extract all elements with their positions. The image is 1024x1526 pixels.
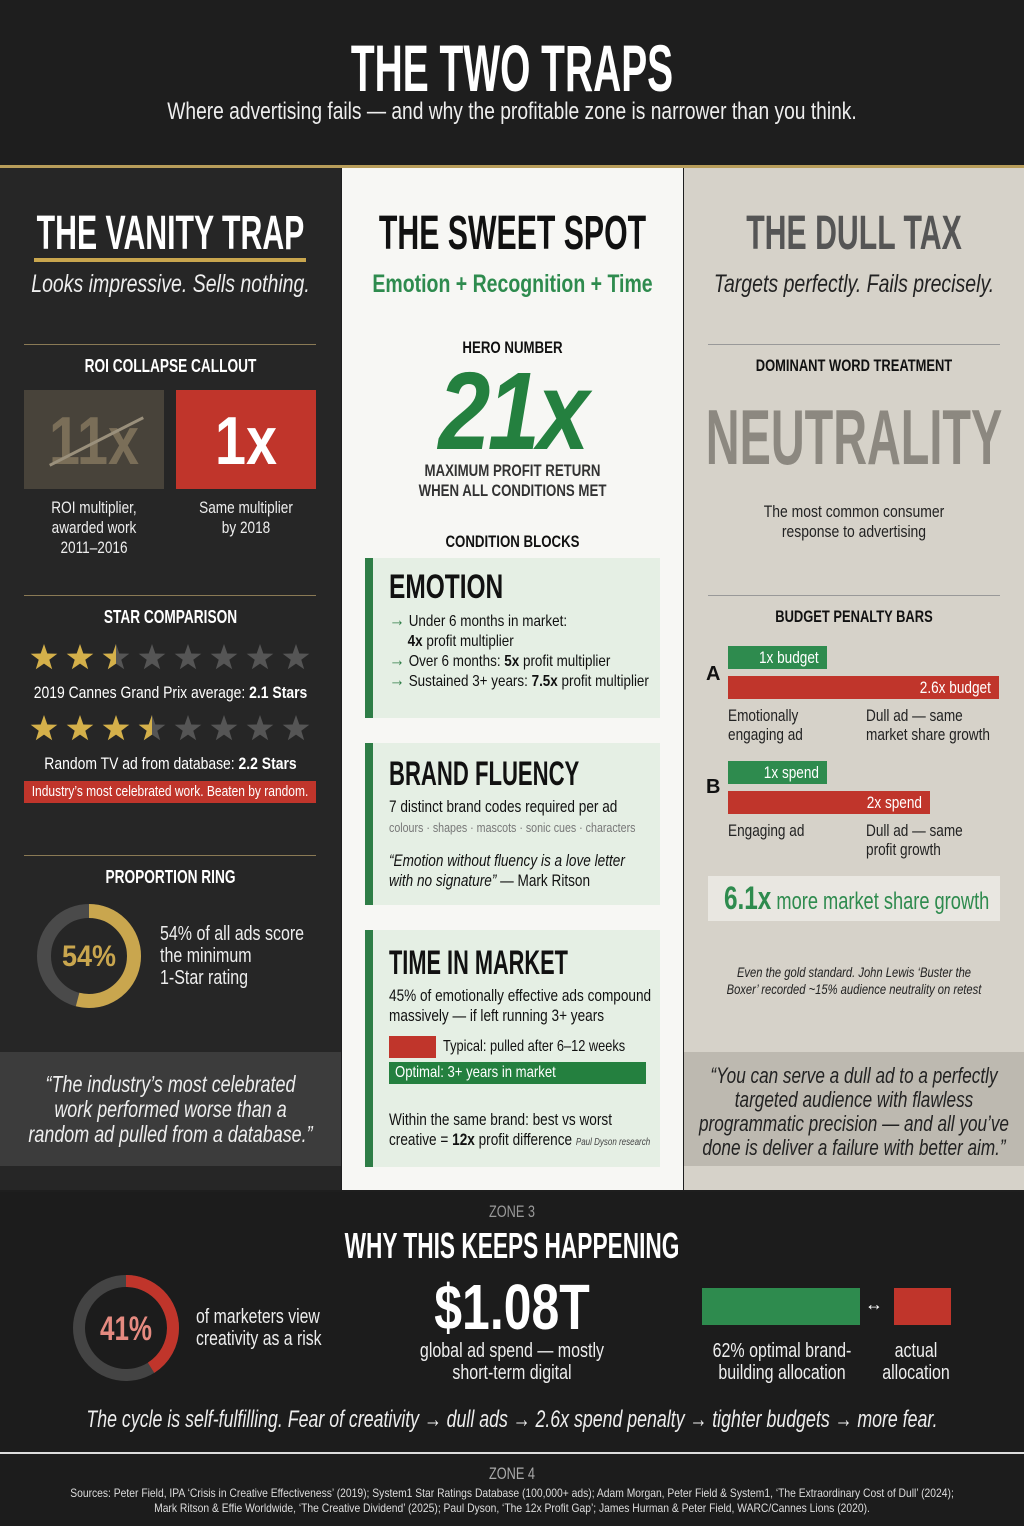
- stat: 1.08T: global ad spend — mostly: [420, 1340, 604, 1362]
- subtitle: Where advertising fails — and why the profitable zone is narrower than you think.: [167, 98, 857, 125]
- quote: dull: “You can serve a dull ad to a perfectly: [710, 1063, 998, 1088]
- allocation bars: actual: [895, 1340, 937, 1362]
- stars row 2: [30, 715, 309, 740]
- quote: dull: programmatic precision — and all you’ve: [699, 1111, 1009, 1136]
- zone 3: why this keeps happening: [0, 1192, 1024, 1452]
- ring: 41%: [73, 1275, 179, 1381]
- bar: optimal: Optimal: 3+ years in market: [395, 1064, 556, 1081]
- box: 11x crossed: 11x: [49, 403, 139, 479]
- block: brand fluency: with no signature” — Mark Ritson: [389, 871, 590, 890]
- block: time in market: Typical: pulled after 6–12 weeks: [443, 1038, 625, 1055]
- block: emotion: → Sustained 3+ years: 7.5x profit multiplier: [389, 670, 649, 691]
- bar: optimal: [389, 1062, 646, 1084]
- panel: dull tax: [684, 168, 1024, 1190]
- block: time in market: creative = 12x profit difference Paul Dyson research: [389, 1130, 650, 1149]
- tagline: Targets perfectly. Fails precisely.: [714, 270, 994, 298]
- zone 4: sources: ZONE 4: [489, 1464, 535, 1483]
- block: time in market: Within the same brand: best vs worst: [389, 1110, 612, 1129]
- block: time in market: 45% of emotionally effective ads compound: [389, 986, 651, 1005]
- red banner: Industry’s most celebrated work. Beaten by random.: [32, 783, 308, 800]
- budget penalty bars: 1x budget: [759, 648, 819, 667]
- subheading: Emotion + Recognition + Time: [372, 270, 653, 298]
- header: [0, 0, 1024, 166]
- bar: typical: [389, 1036, 436, 1058]
- zone 3: why this keeps happening: creativity as a risk: [196, 1328, 322, 1350]
- allocation bars: 62% optimal brand-: [713, 1340, 851, 1362]
- zone 4: sources: [0, 1454, 1024, 1526]
- caption: John Lewis: Boxer’ recorded ~15% audience neutrality on retest: [727, 981, 981, 997]
- budget penalty bars: Emotionally: [728, 706, 798, 725]
- block: emotion: [365, 558, 660, 718]
- caption: ROI awarded: 2011–2016: [60, 538, 128, 557]
- budget penalty bars: profit growth: [866, 840, 941, 859]
- tagline: Looks impressive. Sells nothing.: [31, 270, 310, 298]
- ROI collapse callout: ROI COLLAPSE CALLOUT: [85, 356, 256, 376]
- callout: 6.1x: 6.1x more market share growth: [724, 880, 989, 916]
- hero number: [418, 338, 606, 500]
- panel: sweet spot: [342, 168, 683, 1190]
- allocation bars: allocation: [882, 1362, 950, 1384]
- quote: vanity: “The industry’s most celebrated: [46, 1071, 295, 1097]
- caption: same multiplier: Same multiplier: [199, 498, 293, 517]
- neutrality word: [706, 356, 1002, 541]
- quote: vanity: random ad pulled from a database.”: [28, 1121, 313, 1147]
- neutrality word: NEUTRALITY: [706, 393, 1002, 481]
- caption: ROI awarded: ROI multiplier,: [51, 498, 137, 517]
- neutrality word: response to advertising: [782, 522, 926, 541]
- zone 3: why this keeps happening: of marketers view: [196, 1306, 320, 1328]
- star comparison: Random TV ad from database: 2.2 Stars: [44, 754, 297, 773]
- quote: vanity: work performed worse than a: [54, 1096, 287, 1122]
- block: emotion: → Over 6 months: 5x profit multiplier: [389, 650, 610, 671]
- allocation bars: [702, 1288, 951, 1384]
- budget penalty bars: 1x spend: [764, 763, 819, 782]
- allocation bars: ↔: [865, 1294, 883, 1314]
- block: emotion: → Under 6 months in market:: [389, 610, 567, 631]
- allocation bars: building allocation: [718, 1362, 846, 1384]
- hero number: WHEN ALL CONDITIONS MET: [419, 481, 606, 500]
- heading: vanity trap: THE VANITY TRAP: [37, 207, 304, 260]
- stat: 1.08T: [420, 1271, 604, 1384]
- budget penalty bars: Dull ad — same: [866, 706, 963, 725]
- budget penalty bars: Dull ad — same: [866, 821, 963, 840]
- hero number: 21x: [438, 350, 587, 473]
- budget penalty bars: 2.6x budget: [920, 678, 991, 697]
- heading: sweet spot: THE SWEET SPOT: [379, 207, 646, 260]
- caption: ROI awarded: awarded work: [52, 518, 136, 537]
- budget penalty bars: B: [706, 776, 720, 798]
- block: brand fluency: 7 distinct brand codes required per ad: [389, 797, 617, 816]
- box: 11x crossed: [24, 390, 164, 489]
- caption: John Lewis: Even the gold standard. John Lewis ‘Buster the: [737, 964, 971, 980]
- stat: 1.08T: short-term digital: [452, 1362, 572, 1384]
- budget penalty bars: engaging ad: [728, 725, 803, 744]
- block: brand fluency: colours · shapes · mascots · sonic cues · characters: [389, 820, 635, 835]
- quote: vanity: [0, 1052, 341, 1166]
- star comparison: STAR COMPARISON: [104, 607, 237, 627]
- budget penalty bars: A: [706, 663, 720, 685]
- zone 3: why this keeps happening: ZONE 3: [489, 1202, 535, 1221]
- block: time in market: TIME IN MARKET: [389, 944, 568, 982]
- caption: same multiplier: by 2018: [222, 518, 270, 537]
- proportion ring: PROPORTION RING: [106, 867, 235, 887]
- budget penalty bars: Engaging ad: [728, 821, 804, 840]
- heading: why: WHY THIS KEEPS HAPPENING: [345, 1225, 679, 1266]
- quote: dull: done is deliver a failure with better aim.”: [702, 1135, 1006, 1160]
- ROI collapse callout: [24, 356, 316, 557]
- caption: same multiplier: [199, 498, 293, 537]
- block: time in market: [365, 930, 660, 1167]
- budget penalty bars: market share growth: [866, 725, 990, 744]
- caption: ROI awarded: [51, 498, 137, 557]
- neutrality word: The most common consumer: [764, 502, 944, 521]
- star comparison: [24, 607, 316, 803]
- cycle statement: The cycle is self-fulfilling. Fear of creativity → dull ads → 2.6x spend penalty → tighter budgets → more fear.: [86, 1406, 938, 1433]
- quote: dull: targeted audience with flawless: [735, 1087, 973, 1112]
- neutrality word: DOMINANT WORD TREATMENT: [756, 356, 952, 375]
- stars row 1: [30, 644, 309, 670]
- block: brand fluency: [365, 743, 660, 905]
- caption: John Lewis: [727, 964, 982, 997]
- budget penalty bars: BUDGET PENALTY BARS: [775, 607, 933, 626]
- panel: sweet spot: CONDITION BLOCKS: [445, 532, 580, 551]
- budget penalty bars: [706, 607, 1000, 921]
- box: 1x: 1x: [215, 403, 277, 479]
- proportion ring: 54% of all ads score: [160, 923, 304, 945]
- block: emotion: EMOTION: [389, 568, 503, 606]
- heading: dull tax: THE DULL TAX: [746, 207, 962, 260]
- ring: 41%: 41%: [100, 1310, 152, 1348]
- box: 1x: [176, 390, 316, 489]
- hero number: MAXIMUM PROFIT RETURN: [424, 461, 601, 480]
- budget penalty bars: 2x spend: [867, 793, 922, 812]
- hero number: HERO NUMBER: [462, 338, 563, 357]
- proportion ring: 54%: [62, 940, 116, 973]
- zone 4: sources: Mark Ritson & Effie Worldwide, ‘The Creative Dividend’ (2025); Paul Dyson, ‘The 12x Profit Gap’; James Hurman & Peter Field, WARC/Cannes Lions (2020).: [154, 1501, 870, 1515]
- proportion ring: 1-Star rating: [160, 967, 248, 989]
- proportion ring: the minimum: [160, 945, 252, 967]
- block: emotion: 4x profit multiplier: [408, 633, 514, 650]
- block: time in market: massively — if left running 3+ years: [389, 1006, 604, 1025]
- panel: vanity trap: [0, 168, 341, 1190]
- block: brand fluency: BRAND FLUENCY: [389, 755, 579, 793]
- zone 4: sources: Sources: Peter Field, IPA ‘Crisis in Creative Effectiveness’ (2019); System1 Star Ratings Database (100,000+ ads); Adam Morgan, Peter Field & System1, ‘The Extraordinary Cost of Dull’ (2024);: [70, 1486, 954, 1500]
- star comparison: 2019 Cannes Grand Prix average: 2.1 Stars: [34, 683, 307, 702]
- block: brand fluency: “Emotion without fluency is a love letter: [389, 851, 625, 870]
- title: THE TWO TRAPS: [351, 31, 673, 105]
- stat: 1.08T: $1.08T: [434, 1271, 590, 1343]
- proportion ring: [37, 867, 304, 1008]
- quote: dull: [684, 1052, 1024, 1166]
